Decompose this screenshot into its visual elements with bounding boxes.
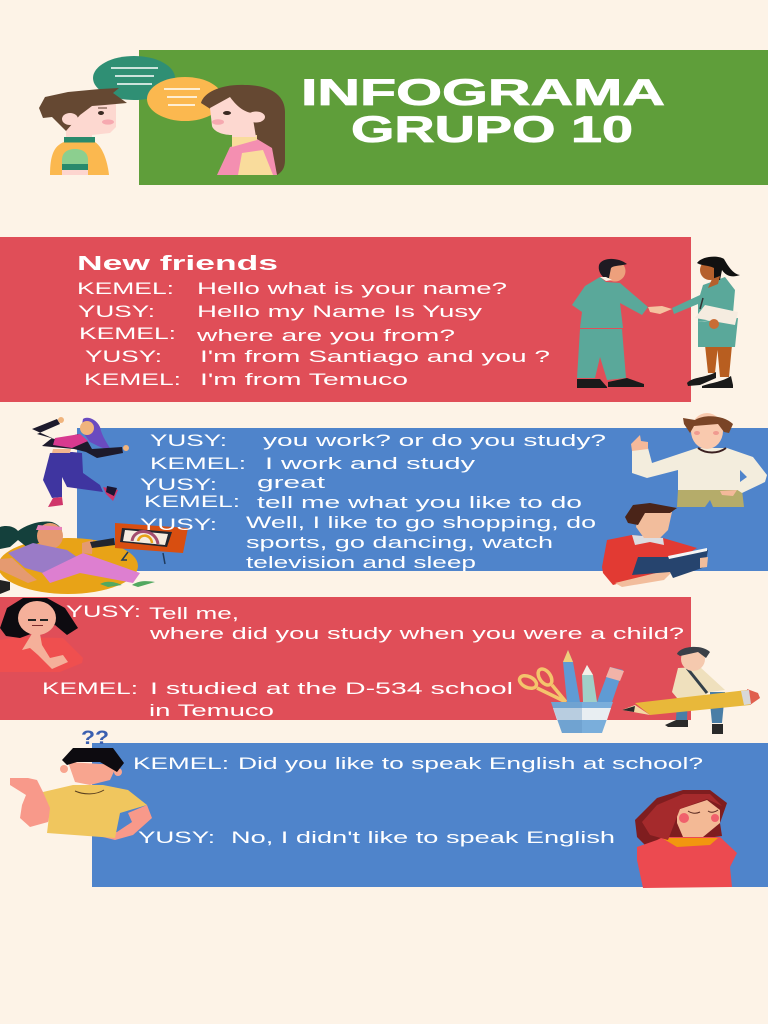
dialogue text: KEMEL:: [150, 454, 246, 473]
dialogue text: KEMEL:: [79, 324, 176, 343]
dialogue text: I work and study: [265, 454, 476, 473]
icon: boy: [39, 88, 127, 175]
dialogue text: great: [257, 473, 325, 492]
dialogue text: Well, I like to go shopping, do: [246, 513, 596, 532]
dialogue text: television and sleep: [246, 553, 476, 572]
icon: man reading book: [602, 503, 708, 587]
icon: television: [115, 520, 188, 564]
dialogue text: No, I didn't like to speak English: [231, 828, 615, 847]
dialogue text: where did you study when you were a child?: [148, 624, 684, 643]
dialogue text: KEMEL:: [77, 279, 174, 298]
dialogue text: YUSY:: [78, 302, 155, 321]
icon: woman on bean bag with tv: [0, 520, 188, 594]
panel: title banner: [139, 50, 768, 185]
dialogue text: I studied at the D-534 school: [150, 679, 513, 698]
title: GRUPO 10: [351, 109, 633, 150]
icon: woman in red dress: [635, 790, 737, 888]
dialogue text: Did you like to speak English at school?: [238, 754, 703, 773]
icon: pencil cup and scissors: [518, 650, 624, 733]
dialogue text: Hello what is your name?: [197, 279, 507, 298]
dialogue text: tell me what you like to do: [257, 493, 582, 512]
dialogue text: in Temuco: [149, 701, 274, 720]
icon: man pointing up: [631, 413, 767, 507]
dialogue text: where are you from?: [195, 326, 455, 345]
question marks: ??: [81, 728, 109, 749]
dialogue text: you work? or do you study?: [263, 431, 606, 450]
dialogue text: YUSY:: [150, 431, 227, 450]
icon: dancing woman: [32, 417, 129, 507]
dialogue text: KEMEL:: [144, 492, 240, 511]
panel: childhood school: [0, 597, 691, 720]
dialogue text: [133, 754, 703, 847]
dialogue text: [42, 602, 684, 720]
dialogue text: I'm from Temuco: [200, 370, 408, 389]
icon: two people talking: [39, 56, 285, 175]
icon: businesswoman shaking hands: [672, 257, 740, 388]
dialogue text: I'm from Santiago and you ?: [200, 347, 550, 366]
dialogue text: KEMEL:: [84, 370, 181, 389]
icon: yellow speech bubble: [147, 77, 223, 121]
dialogue text: [77, 279, 550, 389]
icon: boy riding giant pencil: [622, 647, 760, 734]
dialogue text: KEMEL:: [42, 679, 138, 698]
icon: girl: [201, 85, 285, 175]
icon: green speech bubble: [93, 56, 175, 100]
title: [301, 72, 665, 150]
icon: businessman shaking hands: [572, 259, 672, 388]
heading: new friends: New friends: [77, 253, 278, 275]
dialogue text: sports, go dancing, watch: [246, 533, 553, 552]
icon: thinking woman: [0, 598, 83, 672]
dialogue text: KEMEL:: [133, 754, 229, 773]
dialogue text: Tell me,: [149, 604, 239, 623]
title: INFOGRAMA: [301, 72, 665, 113]
dialogue text: YUSY:: [66, 602, 141, 621]
panel: new friends: [0, 237, 691, 402]
dialogue text: YUSY:: [140, 515, 217, 534]
panel: work and study: [77, 428, 768, 571]
dialogue text: Hello my Name Is Yusy: [197, 302, 483, 321]
dialogue text: YUSY:: [138, 828, 215, 847]
dialogue text: YUSY:: [140, 475, 217, 494]
icon: confused boy: [10, 728, 152, 840]
dialogue text: YUSY:: [85, 347, 162, 366]
dialogue text: [140, 431, 606, 572]
panel: english at school: [92, 743, 768, 887]
